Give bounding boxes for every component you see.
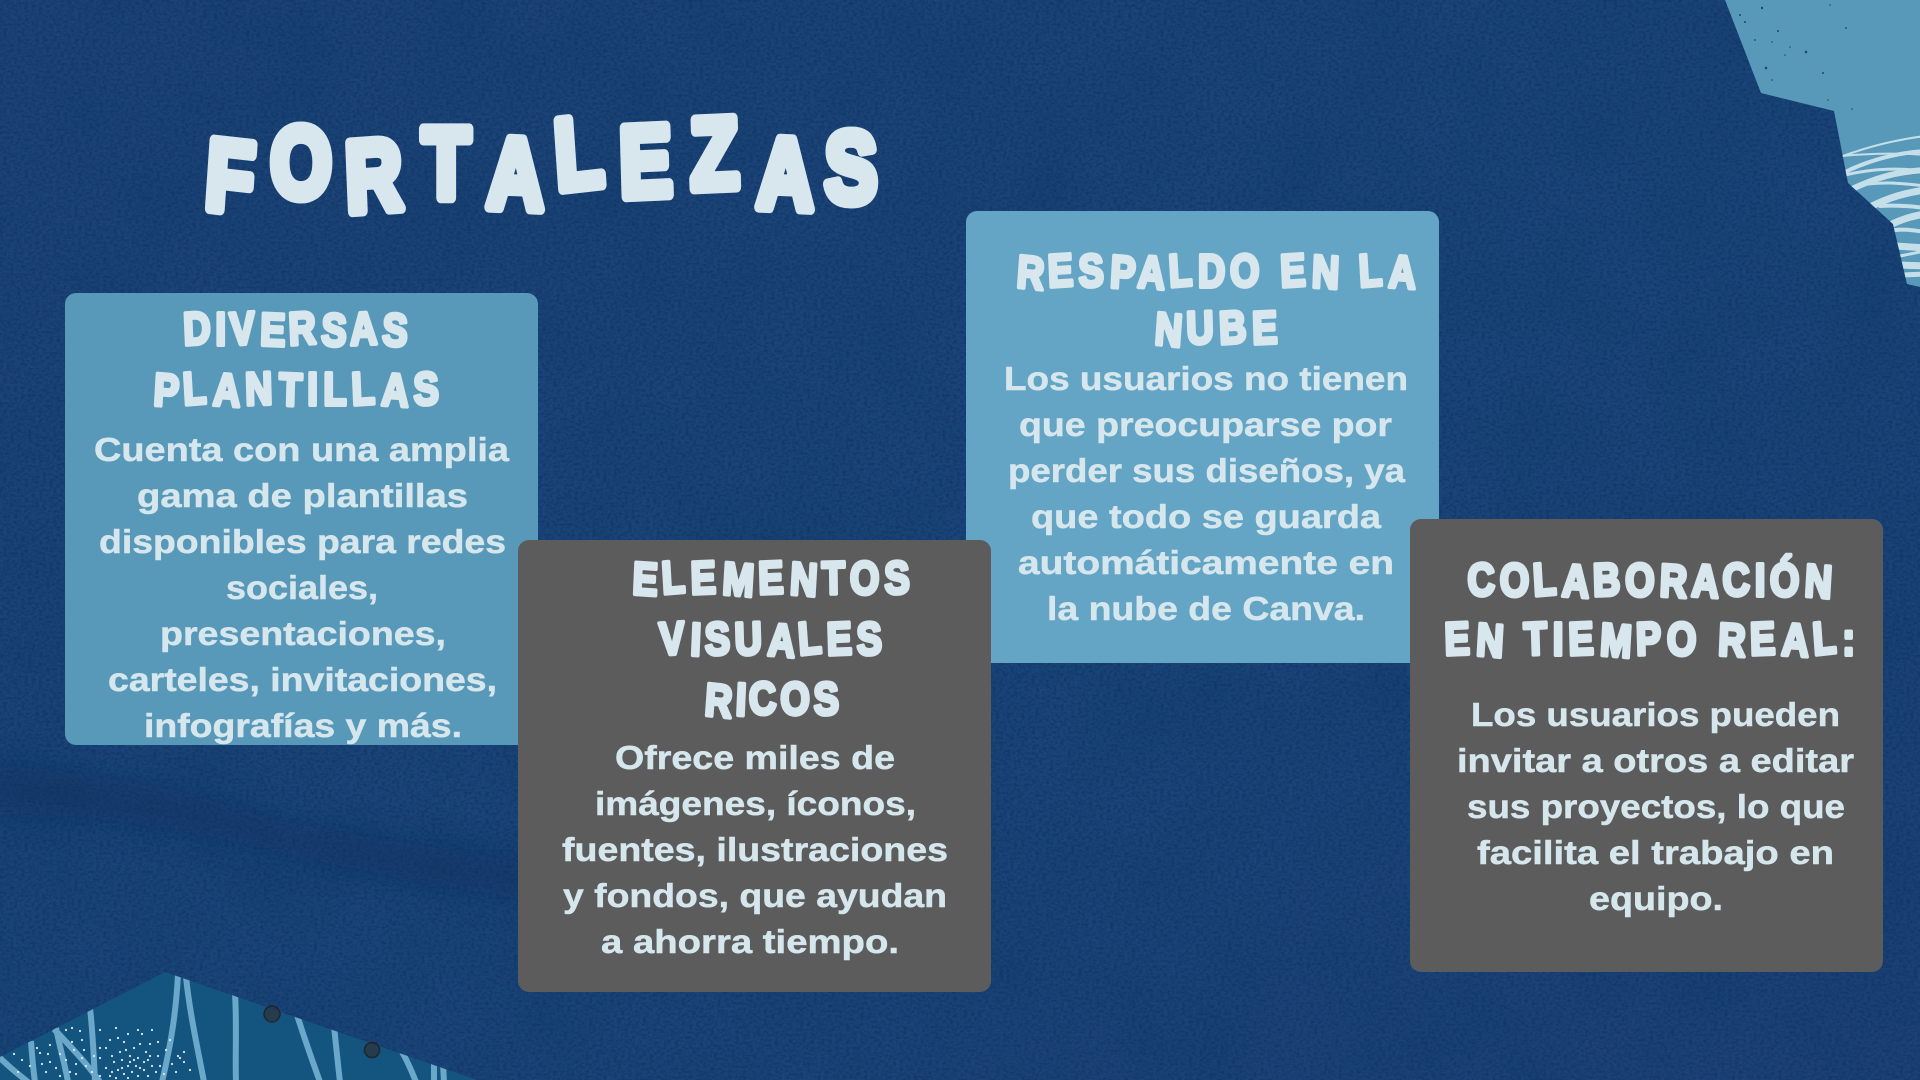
text: Diversas plantillas description: disponibles para redes — [99, 523, 506, 560]
text: Respaldo en la nube description: la nube de Canva. — [1047, 590, 1365, 627]
heading: Colaboración en tiempo real: COLABORACIÓN — [1467, 553, 1834, 608]
heading: Diversas plantillas: PLANTILLAS — [152, 362, 439, 417]
text: Colaboración en tiempo real description: equipo. — [1589, 880, 1723, 917]
heading: Elementos visuales ricos: RICOS — [703, 672, 840, 728]
heading: Colaboración en tiempo real: EN TIEMPO REAL: — [1444, 611, 1855, 667]
decoration: torn paper corner, top right — [1725, 0, 1920, 287]
panel: Elementos visuales ricos — [518, 540, 991, 992]
text: Colaboración en tiempo real description — [1457, 696, 1854, 917]
text: Elementos visuales ricos description: imágenes, íconos, — [595, 785, 916, 822]
text: Colaboración en tiempo real description: Los usuarios pueden — [1471, 696, 1840, 733]
heading: Elementos visuales ricos: ELEMENTOS — [632, 551, 910, 606]
heading: Diversas plantillas: DIVERSAS — [182, 302, 409, 356]
text: Respaldo en la nube description — [1004, 360, 1408, 627]
text: Diversas plantillas description — [94, 431, 510, 744]
text: Respaldo en la nube description: perder sus diseños, ya — [1008, 452, 1406, 489]
text: Respaldo en la nube description: que todo se guarda — [1031, 498, 1382, 535]
text: Elementos visuales ricos description: a ahorra tiempo. — [601, 923, 899, 960]
text: Diversas plantillas description: infografías y más. — [144, 707, 462, 744]
text: Respaldo en la nube description: Los usuarios no tienen — [1004, 360, 1408, 397]
heading: Colaboración en tiempo real — [1444, 553, 1855, 667]
heading: Respaldo en la nube: NUBE — [1153, 301, 1278, 357]
text: Colaboración en tiempo real description: invitar a otros a editar — [1457, 742, 1854, 779]
text: Colaboración en tiempo real description: sus proyectos, lo que — [1467, 788, 1845, 825]
heading: Elementos visuales ricos — [632, 551, 910, 728]
text: Elementos visuales ricos description: y fondos, que ayudan — [563, 877, 947, 914]
text: Respaldo en la nube description: que preocuparse por — [1019, 406, 1392, 443]
text: Diversas plantillas description: carteles, invitaciones, — [108, 661, 497, 698]
heading: Respaldo en la nube: RESPALDO EN LA — [1015, 244, 1417, 300]
text: Elementos visuales ricos description — [562, 739, 948, 960]
heading: Elementos visuales ricos: VISUALES — [658, 611, 882, 667]
text: Elementos visuales ricos description: fuentes, ilustraciones — [562, 831, 948, 868]
text: Diversas plantillas description: presentaciones, — [160, 615, 446, 652]
heading: Diversas plantillas — [152, 302, 439, 417]
text: Elementos visuales ricos description: Ofrece miles de — [615, 739, 895, 776]
text: Diversas plantillas description: sociales, — [226, 569, 378, 606]
heading: Respaldo en la nube — [1015, 244, 1417, 357]
panel: Colaboración en tiempo real — [1410, 519, 1883, 972]
text: Colaboración en tiempo real description: facilita el trabajo en — [1477, 834, 1834, 871]
text: Diversas plantillas description: gama de plantillas — [137, 477, 468, 514]
panel: Respaldo en la nube — [966, 211, 1439, 663]
panel: Diversas plantillas — [65, 293, 538, 745]
decoration: teal paper shape with lines, bottom left — [0, 972, 477, 1080]
title: FORTALEZAS — [202, 96, 877, 236]
text: Diversas plantillas description: Cuenta con una amplia — [94, 431, 510, 468]
text: Respaldo en la nube description: automáticamente en — [1018, 544, 1394, 581]
